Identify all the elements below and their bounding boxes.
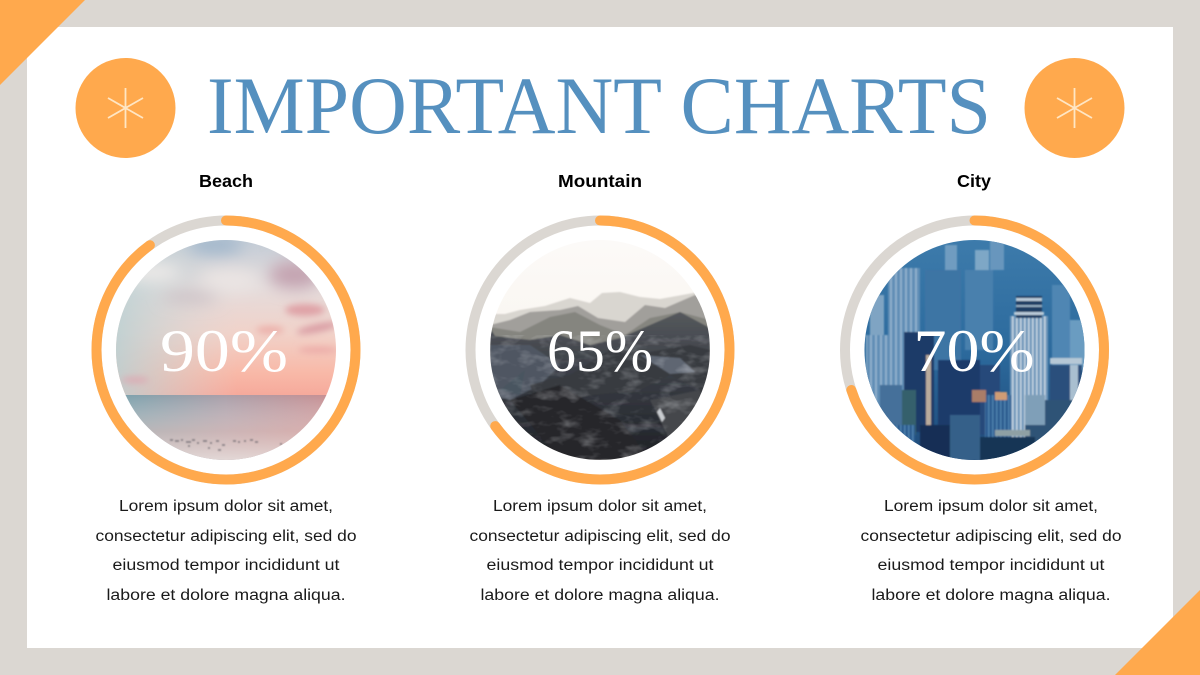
city description: labore et dolore magna aliqua. xyxy=(872,587,1110,604)
bottom-right corner triangle xyxy=(1115,590,1200,675)
mountain photo xyxy=(490,240,710,460)
icon: right asterisk badge xyxy=(1024,58,1124,158)
top-left corner triangle xyxy=(0,0,85,85)
city value: 70% xyxy=(914,318,1034,384)
panel: city xyxy=(845,171,1122,604)
panel: beach xyxy=(96,171,356,604)
mountain donut ring 65% xyxy=(470,220,730,480)
city description: consectetur adipiscing elit, sed do xyxy=(860,528,1122,545)
mountain value: 65% xyxy=(547,318,653,384)
mountain description: Lorem ipsum dolor sit amet, xyxy=(493,498,707,515)
beach description: Lorem ipsum dolor sit amet, xyxy=(119,498,333,515)
mountain description: eiusmod tempor incididunt ut xyxy=(486,557,714,574)
panel: mountain xyxy=(470,171,730,604)
city description: Lorem ipsum dolor sit amet, xyxy=(884,498,1098,515)
beach value: 90% xyxy=(160,318,288,384)
beach donut ring 90% xyxy=(96,220,356,480)
beach description: eiusmod tempor incididunt ut xyxy=(112,557,340,574)
mountain description: consectetur adipiscing elit, sed do xyxy=(470,528,730,545)
mountain description xyxy=(470,498,730,604)
icon: left asterisk badge xyxy=(76,58,176,158)
beach description: labore et dolore magna aliqua. xyxy=(106,587,346,604)
beach description: consectetur adipiscing elit, sed do xyxy=(96,528,356,545)
city photo xyxy=(864,240,1086,462)
title: IMPORTANT CHARTS xyxy=(207,60,991,151)
city donut ring 70% xyxy=(845,220,1104,480)
city description: eiusmod tempor incididunt ut xyxy=(878,557,1105,574)
mountain description: labore et dolore magna aliqua. xyxy=(480,587,720,604)
city heading: City xyxy=(957,171,991,191)
beach photo xyxy=(116,236,340,461)
beach heading: Beach xyxy=(199,171,253,191)
city description xyxy=(860,498,1122,604)
mountain heading: Mountain xyxy=(558,171,642,191)
beach description xyxy=(96,498,356,604)
